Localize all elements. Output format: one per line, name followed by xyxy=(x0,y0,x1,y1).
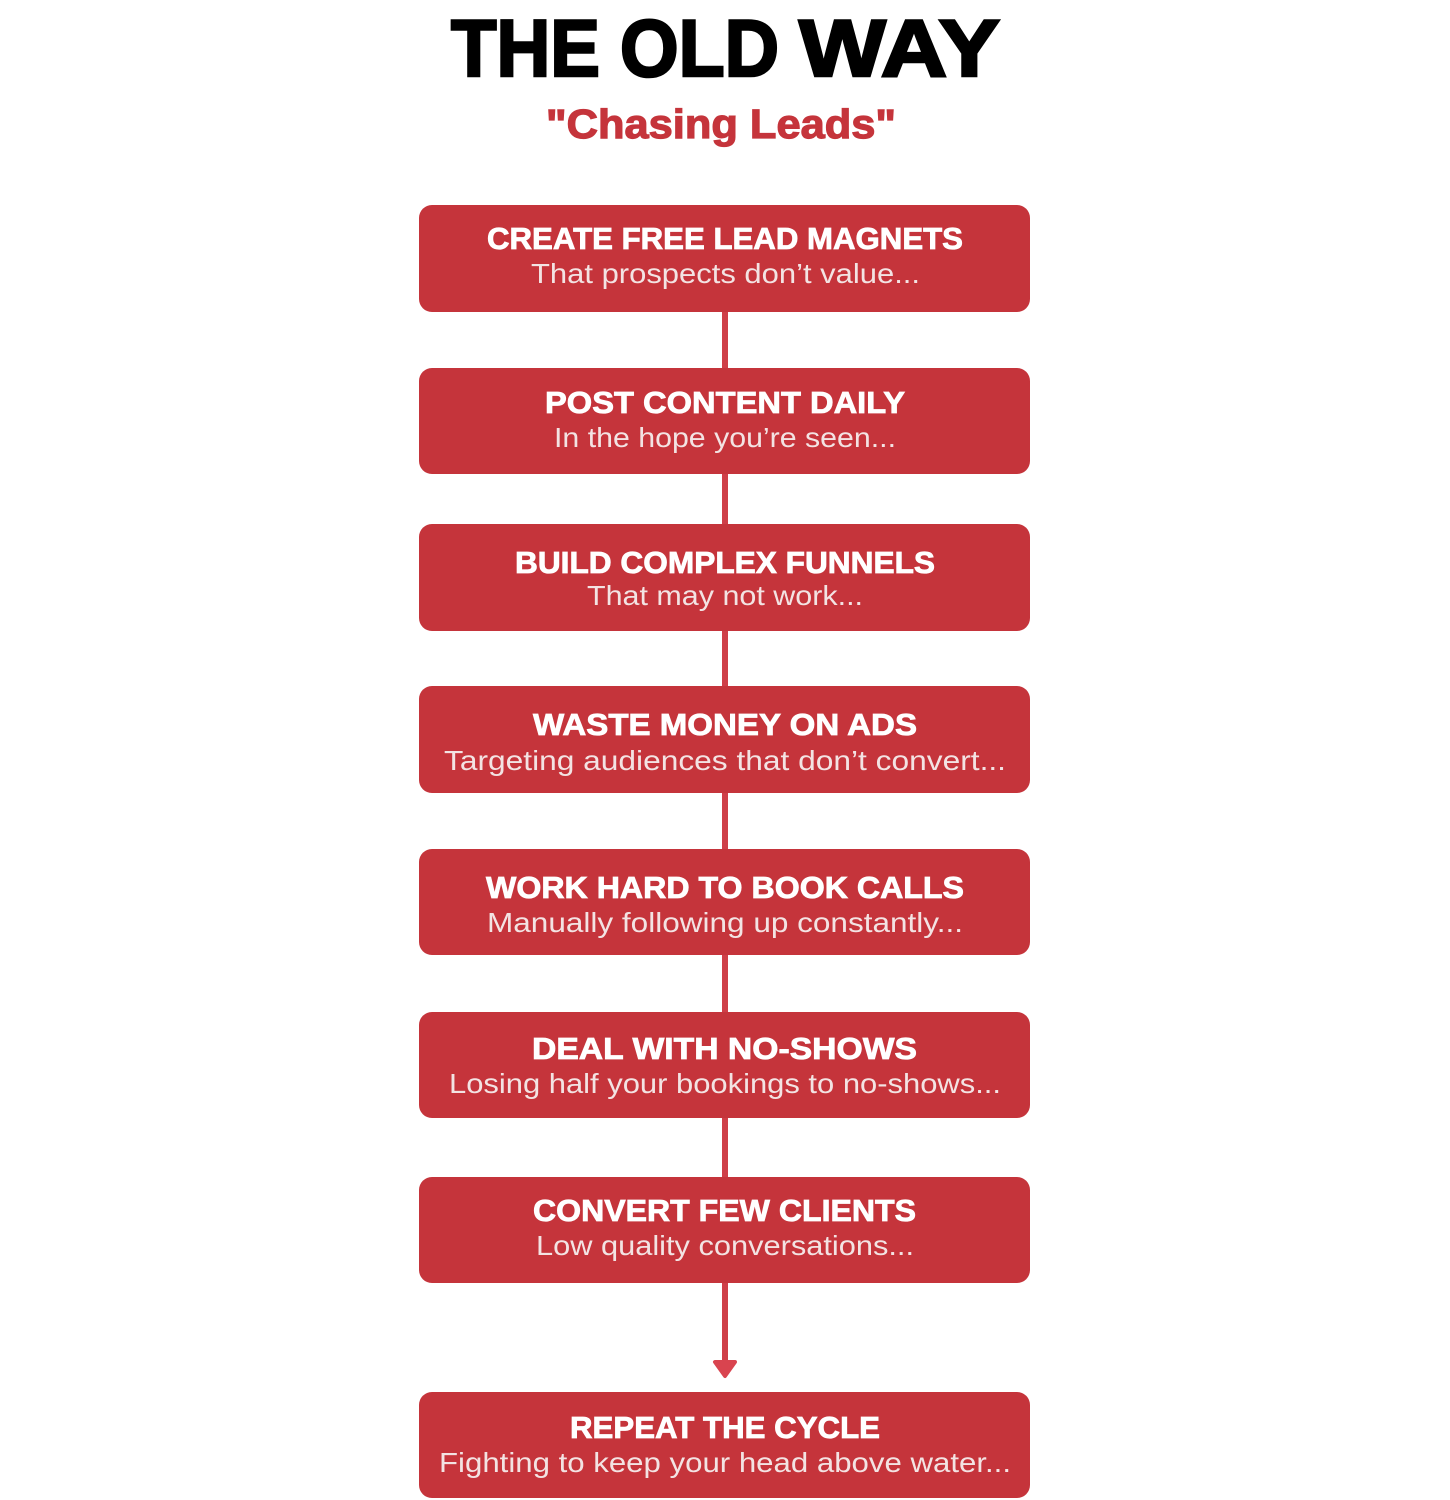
step 5 description: Manually following up constantly... xyxy=(487,907,963,938)
subtitle: "Chasing Leads" xyxy=(546,101,896,147)
panel: step 4 xyxy=(419,686,1030,793)
step 2 description: In the hope you’re seen... xyxy=(554,422,896,453)
panel: step 5 xyxy=(419,849,1030,955)
step 6 description: Losing half your bookings to no-shows... xyxy=(449,1068,1001,1099)
icon: arrow head xyxy=(715,1362,735,1376)
title: WAY xyxy=(799,4,1000,94)
panel: step 6 xyxy=(419,1012,1030,1118)
step 8 heading: REPEAT THE CYCLE xyxy=(570,1410,880,1445)
step 3 description: That may not work... xyxy=(587,580,863,611)
step 8 description: Fighting to keep your head above water... xyxy=(439,1447,1011,1478)
step 4 heading: WASTE MONEY ON ADS xyxy=(533,707,917,742)
panel: step 2 xyxy=(419,368,1030,474)
panel: step 7 xyxy=(419,1177,1030,1283)
connector line between steps xyxy=(722,310,728,1364)
step 1 heading: CREATE FREE LEAD MAGNETS xyxy=(487,221,963,256)
step 5 heading: WORK HARD TO BOOK CALLS xyxy=(486,870,964,905)
panel: step 1 xyxy=(419,205,1030,312)
panel: step 8 xyxy=(419,1392,1030,1498)
step 7 heading: CONVERT FEW CLIENTS xyxy=(533,1193,916,1228)
title: OLD xyxy=(620,4,779,94)
step 7 description: Low quality conversations... xyxy=(536,1230,914,1261)
title: THE xyxy=(451,4,600,94)
step 3 heading: BUILD COMPLEX FUNNELS xyxy=(515,545,935,580)
step 2 heading: POST CONTENT DAILY xyxy=(545,385,905,420)
step 1 description: That prospects don’t value... xyxy=(531,258,920,289)
panel: step 3 xyxy=(419,524,1030,631)
title xyxy=(451,4,1000,94)
step 6 heading: DEAL WITH NO-SHOWS xyxy=(532,1031,917,1066)
step 4 description: Targeting audiences that don’t convert... xyxy=(444,745,1006,776)
